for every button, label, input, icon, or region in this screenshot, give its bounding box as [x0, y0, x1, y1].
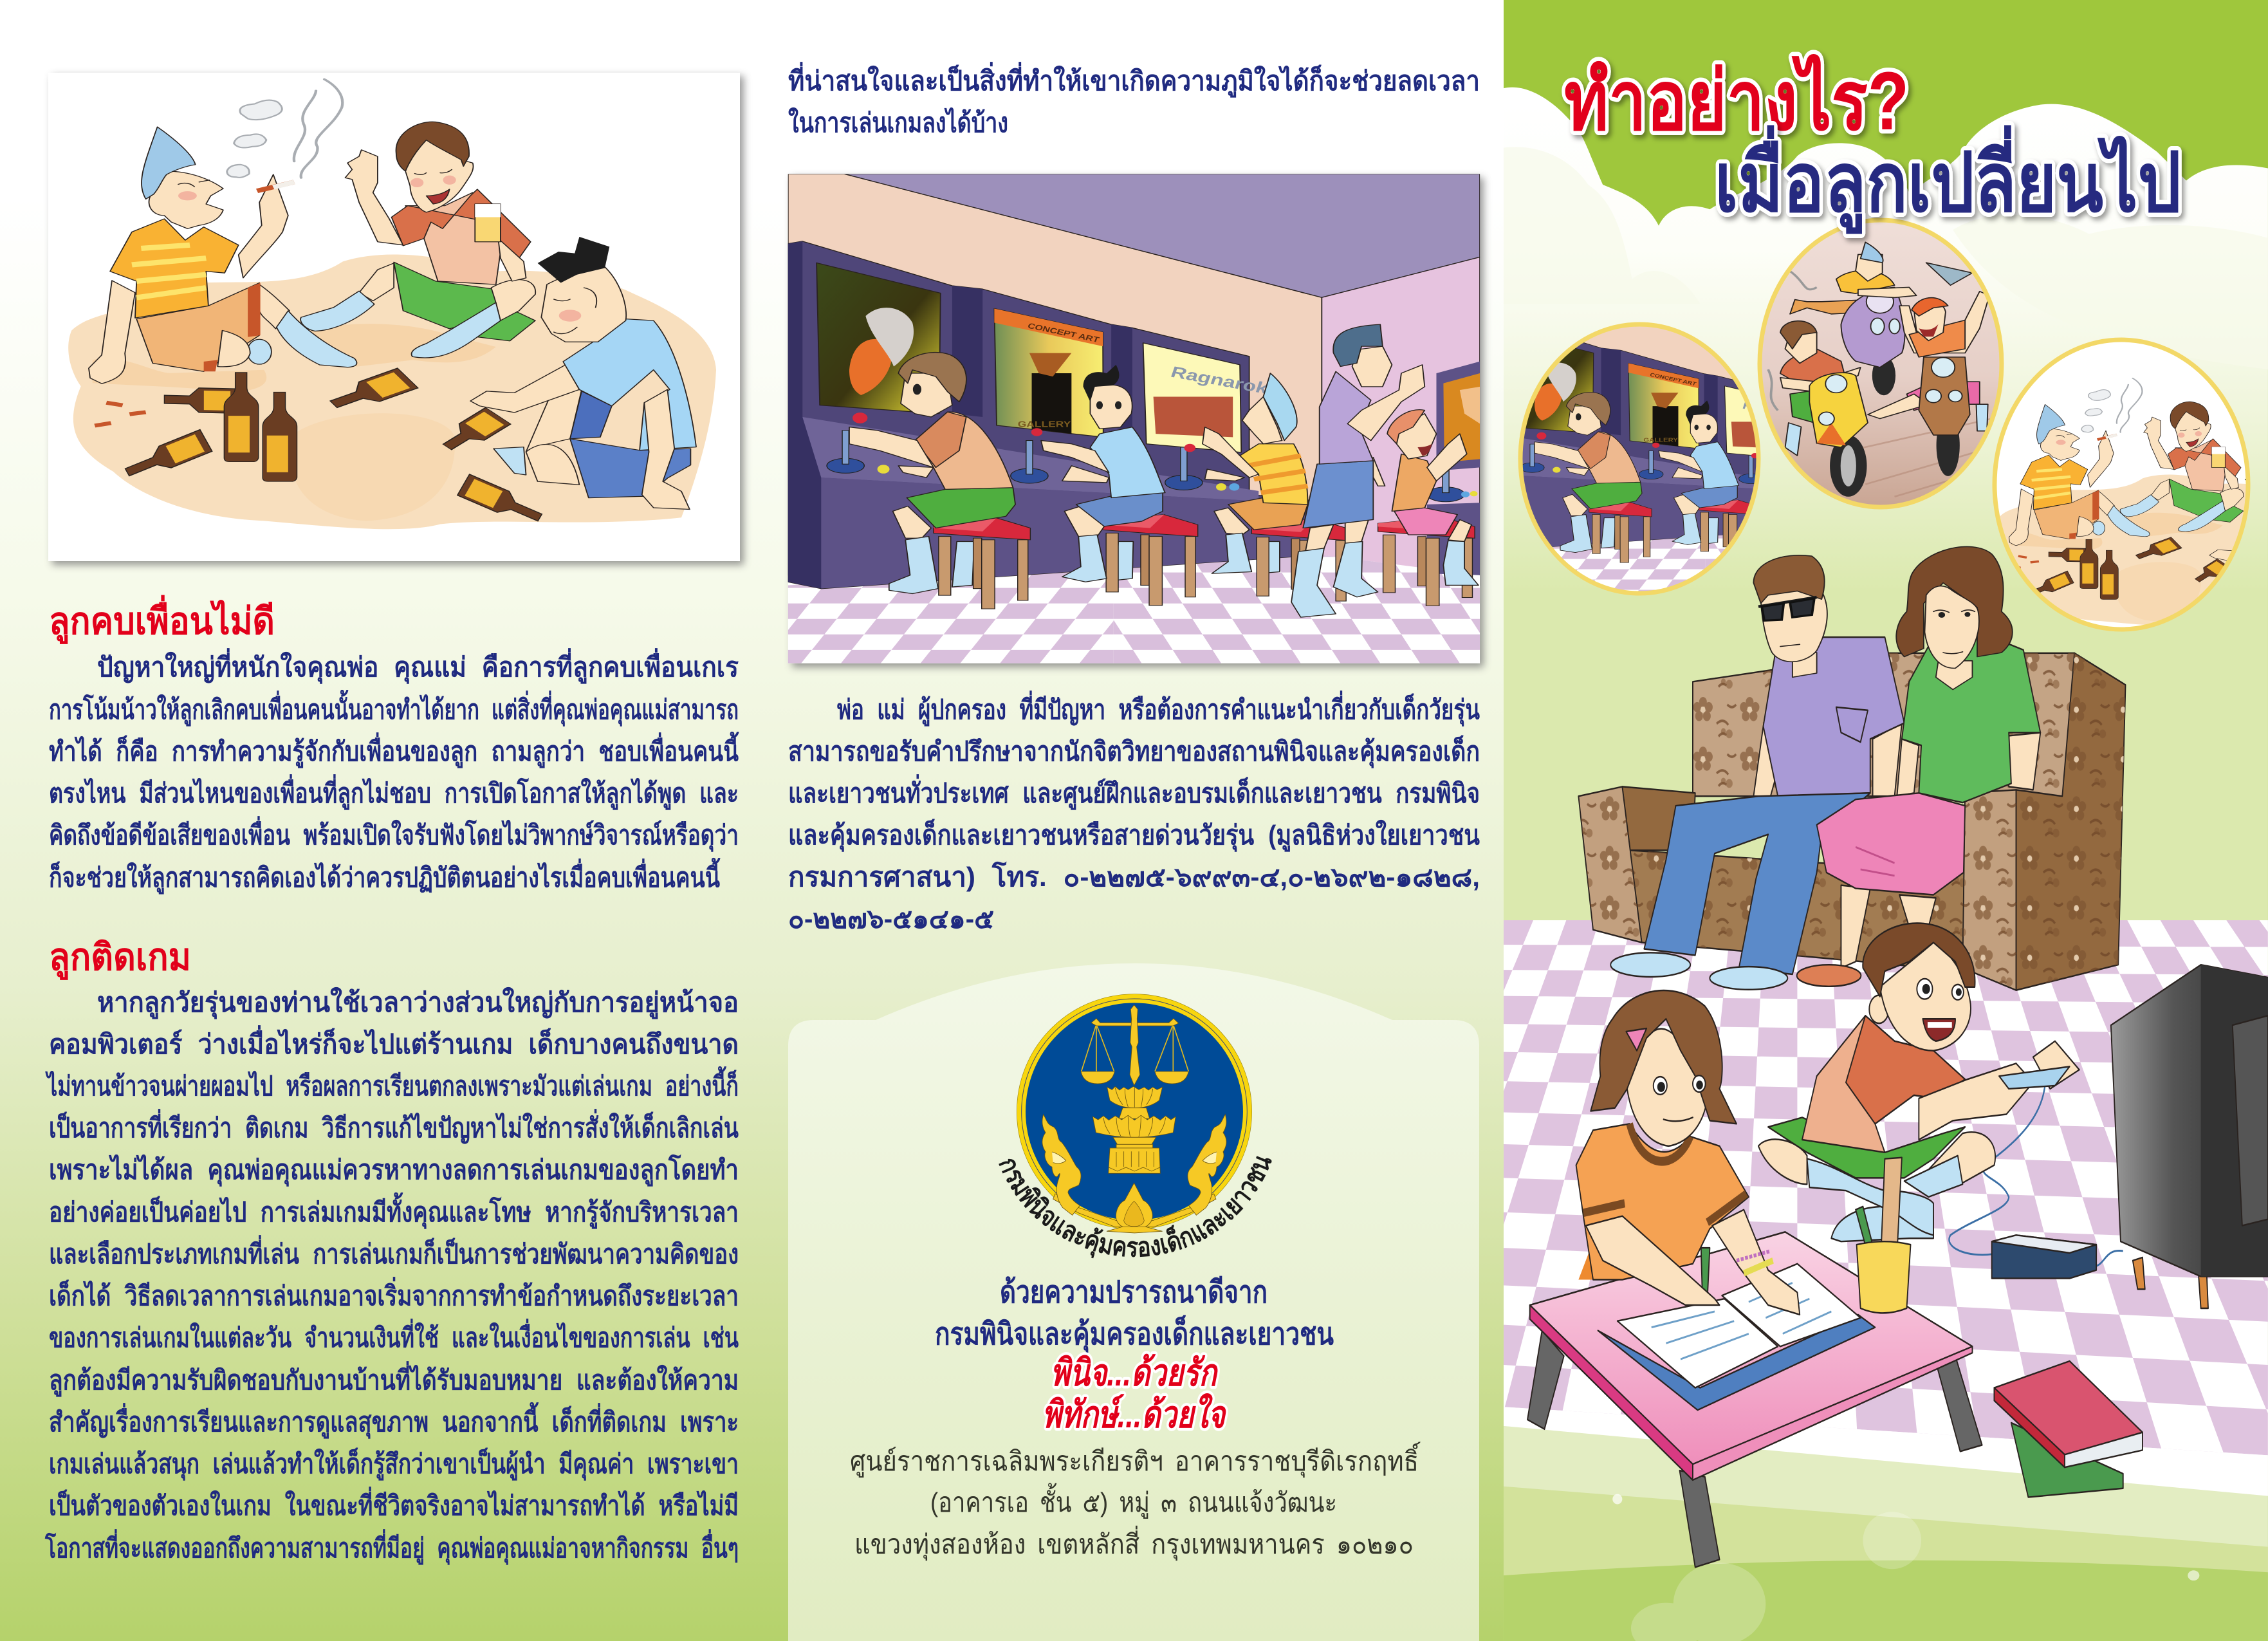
- game console and cable: [1949, 1082, 2123, 1279]
- text block: game addiction: ไม่ทานข้าวจนผ่ายผอมไป หรือผลการเรียนตกลงเพราะมัวแต่เล่นเกม อย่างนี้ก็: [45, 1066, 739, 1101]
- text: sender: [935, 1275, 1334, 1353]
- bottles and cigarette butts: [95, 368, 546, 528]
- rider on brown bike: [1868, 292, 1989, 476]
- text block: game addiction: เป็นอาการที่เรียกว่า ติดเกม วิธีการแก้ไขปัญหาไม่ใช่การสั่งให้เด็กเลิกเล่น: [49, 1109, 739, 1144]
- text block: bad friends: การโน้มน้าวให้ลูกเลิกคบเพื่อนคนนั้นอาจทำได้ยาก แต่สิ่งที่คุณพ่อคุณแม่สามารถ: [49, 689, 739, 727]
- title: how to: ทำอย่างไร?: [1564, 54, 1909, 147]
- text block: game addiction: เป็นตัวของตัวเองในเกม ในขณะที่ชีวิตจริงอาจไม่สามารถทำได้ หรือไม่มี: [49, 1487, 739, 1521]
- ground patch: [68, 254, 716, 529]
- stacked books: [1994, 1361, 2143, 1497]
- circle: motorbike scene: [1749, 214, 2011, 509]
- text block: game addiction: เพราะไม่ได้ผล คุณพ่อคุณแม่ควรหาทางลดการเล่นเกมของลูกโดยทำ: [49, 1154, 739, 1187]
- text block: game addiction: [44, 987, 739, 1565]
- panel: cover background: [1504, 0, 2268, 1641]
- checkered floor: [788, 555, 1480, 663]
- boy in striped shirt and stool: [1203, 373, 1349, 609]
- panel: department credits: [788, 963, 1479, 1641]
- text block: game addiction: อย่างค่อยเป็นค่อยไป การเล่มเกมมีทั้งคุณและโทษ หากรู้จักบริหารเวลา: [49, 1192, 739, 1229]
- logo: department emblem: กรมพินิจและคุ้มครองเด็กและเยาวชน: [999, 1156, 1271, 1259]
- text block: bad friends: ทำได้ ก็คือ การทำความรู้จักกับเพื่อนของลูก ถามลูกว่า ชอบเพื่อนคนนี้: [49, 731, 739, 768]
- low pink table: [1527, 1232, 1982, 1567]
- girl with orange hair and stool: [1378, 410, 1479, 606]
- text block: game addiction: ของการเล่นเกมในแต่ละวัน จำนวนเงินที่ใช้ และในเงื่อนไขของการเล่น เช่น: [49, 1319, 739, 1353]
- emblem: lotus pedestal: [1093, 1086, 1175, 1173]
- teen with black hair: [470, 237, 696, 510]
- text block: game addiction: เด็กได้ วิธีลดเวลาการเล่นเกมอาจเริ่มจากการทำข้อกำหนดถึงระยะเวลา: [49, 1277, 739, 1311]
- text block: where to get help: และคุ้มครองเด็กและเยาวชนหรือสายด่วนวัยรุ่น (มูลนิธิห่วงใยเยาวชน: [788, 819, 1480, 852]
- illustration: game arcade: [788, 174, 1484, 667]
- checkered floor in perspective: [1131, 290, 2268, 1562]
- teen with blue hair: [89, 127, 356, 384]
- arcade cabinets: [788, 241, 1480, 589]
- circle: arcade scene: [1518, 322, 1760, 596]
- television: [2111, 965, 2268, 1308]
- arcade screens: [816, 263, 1480, 463]
- man standing in purple shirt: [1291, 324, 1424, 617]
- text block: game addiction: สำคัญเรื่องการเรียนและการดูแลสุขภาพ นอกจากนี้ เด็กที่ติดเกม เพราะ: [49, 1402, 739, 1439]
- text: slogans: พิทักษ์...ด้วยใจ: [1042, 1393, 1226, 1436]
- heading: game addiction: ลูกติดเกม: [49, 936, 191, 980]
- logo: department emblem: [999, 994, 1271, 1259]
- mother's body: [1797, 637, 2040, 987]
- text: address: [850, 1442, 1421, 1561]
- text block: game addiction: ลูกต้องมีความรับผิดชอบกับงานบ้านที่ได้รับมอบหมาย และต้องให้ความ: [49, 1361, 739, 1397]
- text block: continuation at top of centre column: ในการเล่นเกมลงได้บ้าง: [788, 107, 1008, 138]
- text: slogans: [1042, 1352, 1226, 1436]
- text block: bad friends: ปัญหาใหญ่ที่หนักใจคุณพ่อ คุณแม่ คือการที่ลูกคบเพื่อนเกเร: [97, 648, 739, 684]
- text block: game addiction: หากลูกวัยรุ่นของท่านใช้เวลาว่างส่วนใหญ่กับการอยู่หน้าจอ: [97, 987, 739, 1019]
- heading: bad friends: ลูกคบเพื่อนไม่ดี: [49, 595, 275, 644]
- text block: where to get help: กรมการศาสนา) โทร. ๐-๒๒๗๕-๖๙๙๓-๔,๐-๒๖๙๒-๑๘๒๘,: [788, 861, 1480, 892]
- father's head: [1753, 555, 1827, 677]
- circle: drinking scene: [1995, 340, 2268, 629]
- arcade screens: Ragnarok: [1168, 364, 1271, 398]
- text block: continuation at top of centre column: [788, 62, 1480, 138]
- text: address: แขวงทุ่งสองห้อง เขตหลักสี่ กรุงเทพมหานคร ๑๐๒๑๐: [854, 1526, 1414, 1561]
- boy in blue shirt and stool: [1041, 365, 1198, 606]
- text block: bad friends: ตรงไหน มีส่วนไหนของเพื่อนที่ลูกไม่ชอบ การเปิดโอกาสให้ลูกได้พูด และ: [49, 774, 739, 810]
- joysticks: [827, 413, 1477, 502]
- illustration: family in the living room: [1131, 290, 2268, 1641]
- text block: bad friends: ก็จะช่วยให้ลูกสามารถคิดเองได้ว่าควรปฏิบัติตนอย่างไรเมื่อคบเพื่อนคนนี้: [49, 857, 721, 895]
- text: address: ศูนย์ราชการเฉลิมพระเกียรติฯ อาคารราชบุรีดิเรกฤทธิ์: [850, 1442, 1421, 1478]
- boy playing: [1758, 923, 2079, 1241]
- girl writing: [1576, 990, 1800, 1315]
- text block: game addiction: คอมพิวเตอร์ ว่างเมื่อไหร่ก็จะไปแต่ร้านเกม เด็กบางคนถึงขนาด: [49, 1025, 739, 1059]
- text block: where to get help: พ่อ แม่ ผู้ปกครอง ที่มีปัญหา หรือต้องการคำแนะนำเกี่ยวกับเด็กวัยรุ่น: [837, 691, 1480, 727]
- boy in orange shirt and stool: [849, 353, 1030, 609]
- lawn bands: [1504, 1400, 2268, 1641]
- text block: where to get help: [788, 691, 1480, 934]
- rider on purple bike: [1790, 242, 1917, 395]
- text block: game addiction: เกมเล่นแล้วสนุก เล่นแล้วทำให้เด็กรู้สึกว่าเขาเป็นผู้นำ มีคุณค่า เพราะเขา: [49, 1447, 739, 1481]
- emblem: ring: [1017, 994, 1252, 1229]
- text block: game addiction: และเลือกประเภทเกมที่เล่น การเล่นเกมก็เป็นการช่วยพัฒนาความคิดของ: [49, 1235, 739, 1269]
- rider on yellow bike: [1780, 321, 1868, 497]
- text block: bad friends: [49, 648, 739, 895]
- text block: game addiction: โอกาสที่จะแสดงออกถึงความสามารถที่มีอยู่ คุณพ่อคุณแม่อาจหากิจกรรม อื่นๆ: [44, 1529, 739, 1565]
- pencil cup with ruler: [1856, 1158, 1910, 1313]
- text: sender: กรมพินิจและคุ้มครองเด็กและเยาวชน: [935, 1315, 1334, 1353]
- text: address: (อาคารเอ ชั้น ๕) หมู่ ๓ ถนนแจ้งวัฒนะ: [930, 1483, 1337, 1519]
- text block: continuation at top of centre column: ที่น่าสนใจและเป็นสิ่งที่ทำให้เขาเกิดความภูมิใจได้ก็จะช่วยลดเวลา: [788, 62, 1480, 98]
- teen with brown hair and glass: [300, 122, 535, 358]
- text block: where to get help: สามารถขอรับคำปรึกษาจากนักจิตวิทยาของสถานพินิจและคุ้มครองเด็ก: [788, 735, 1480, 768]
- text block: bad friends: คิดถึงข้อดีข้อเสียของเพื่อน พร้อมเปิดใจรับฟังโดยไม่วิพากษ์วิจารณ์หรือดุว่า: [49, 816, 739, 852]
- room walls and ceiling: [788, 174, 1480, 663]
- emblem: naga: [1042, 1115, 1081, 1215]
- emblem: scales: [1081, 1005, 1188, 1086]
- illustration: teens smoking and drinking: [48, 73, 744, 565]
- title: when your child changes: เมื่อลูกเปลี่ยนไป: [1715, 125, 2181, 234]
- arcade screens: GALLERY: [1018, 420, 1071, 429]
- open book: [1598, 1264, 1875, 1410]
- father's body: [1610, 637, 1904, 990]
- background: left and centre pages: [0, 0, 1504, 1641]
- sofa: [1578, 653, 2126, 990]
- text: sender: ด้วยความปรารถนาดีจาก: [1000, 1275, 1268, 1310]
- emblem: circular name: [999, 1162, 1270, 1257]
- mother's head: [1896, 546, 2013, 690]
- smoke: [227, 100, 282, 178]
- text: slogans: พินิจ...ด้วยรัก: [1051, 1352, 1218, 1394]
- arcade screens: CONCEPT ART: [1026, 321, 1101, 344]
- emblem: lower ring band and lotus bud: [1053, 1183, 1216, 1233]
- text block: where to get help: และเยาวชนทั่วประเทศ และศูนย์ฝึกและอบรมเด็กและเยาวชน กรมพินิจ: [788, 774, 1480, 810]
- text block: where to get help: ๐-๒๒๗๖-๕๑๔๑-๕: [788, 904, 994, 934]
